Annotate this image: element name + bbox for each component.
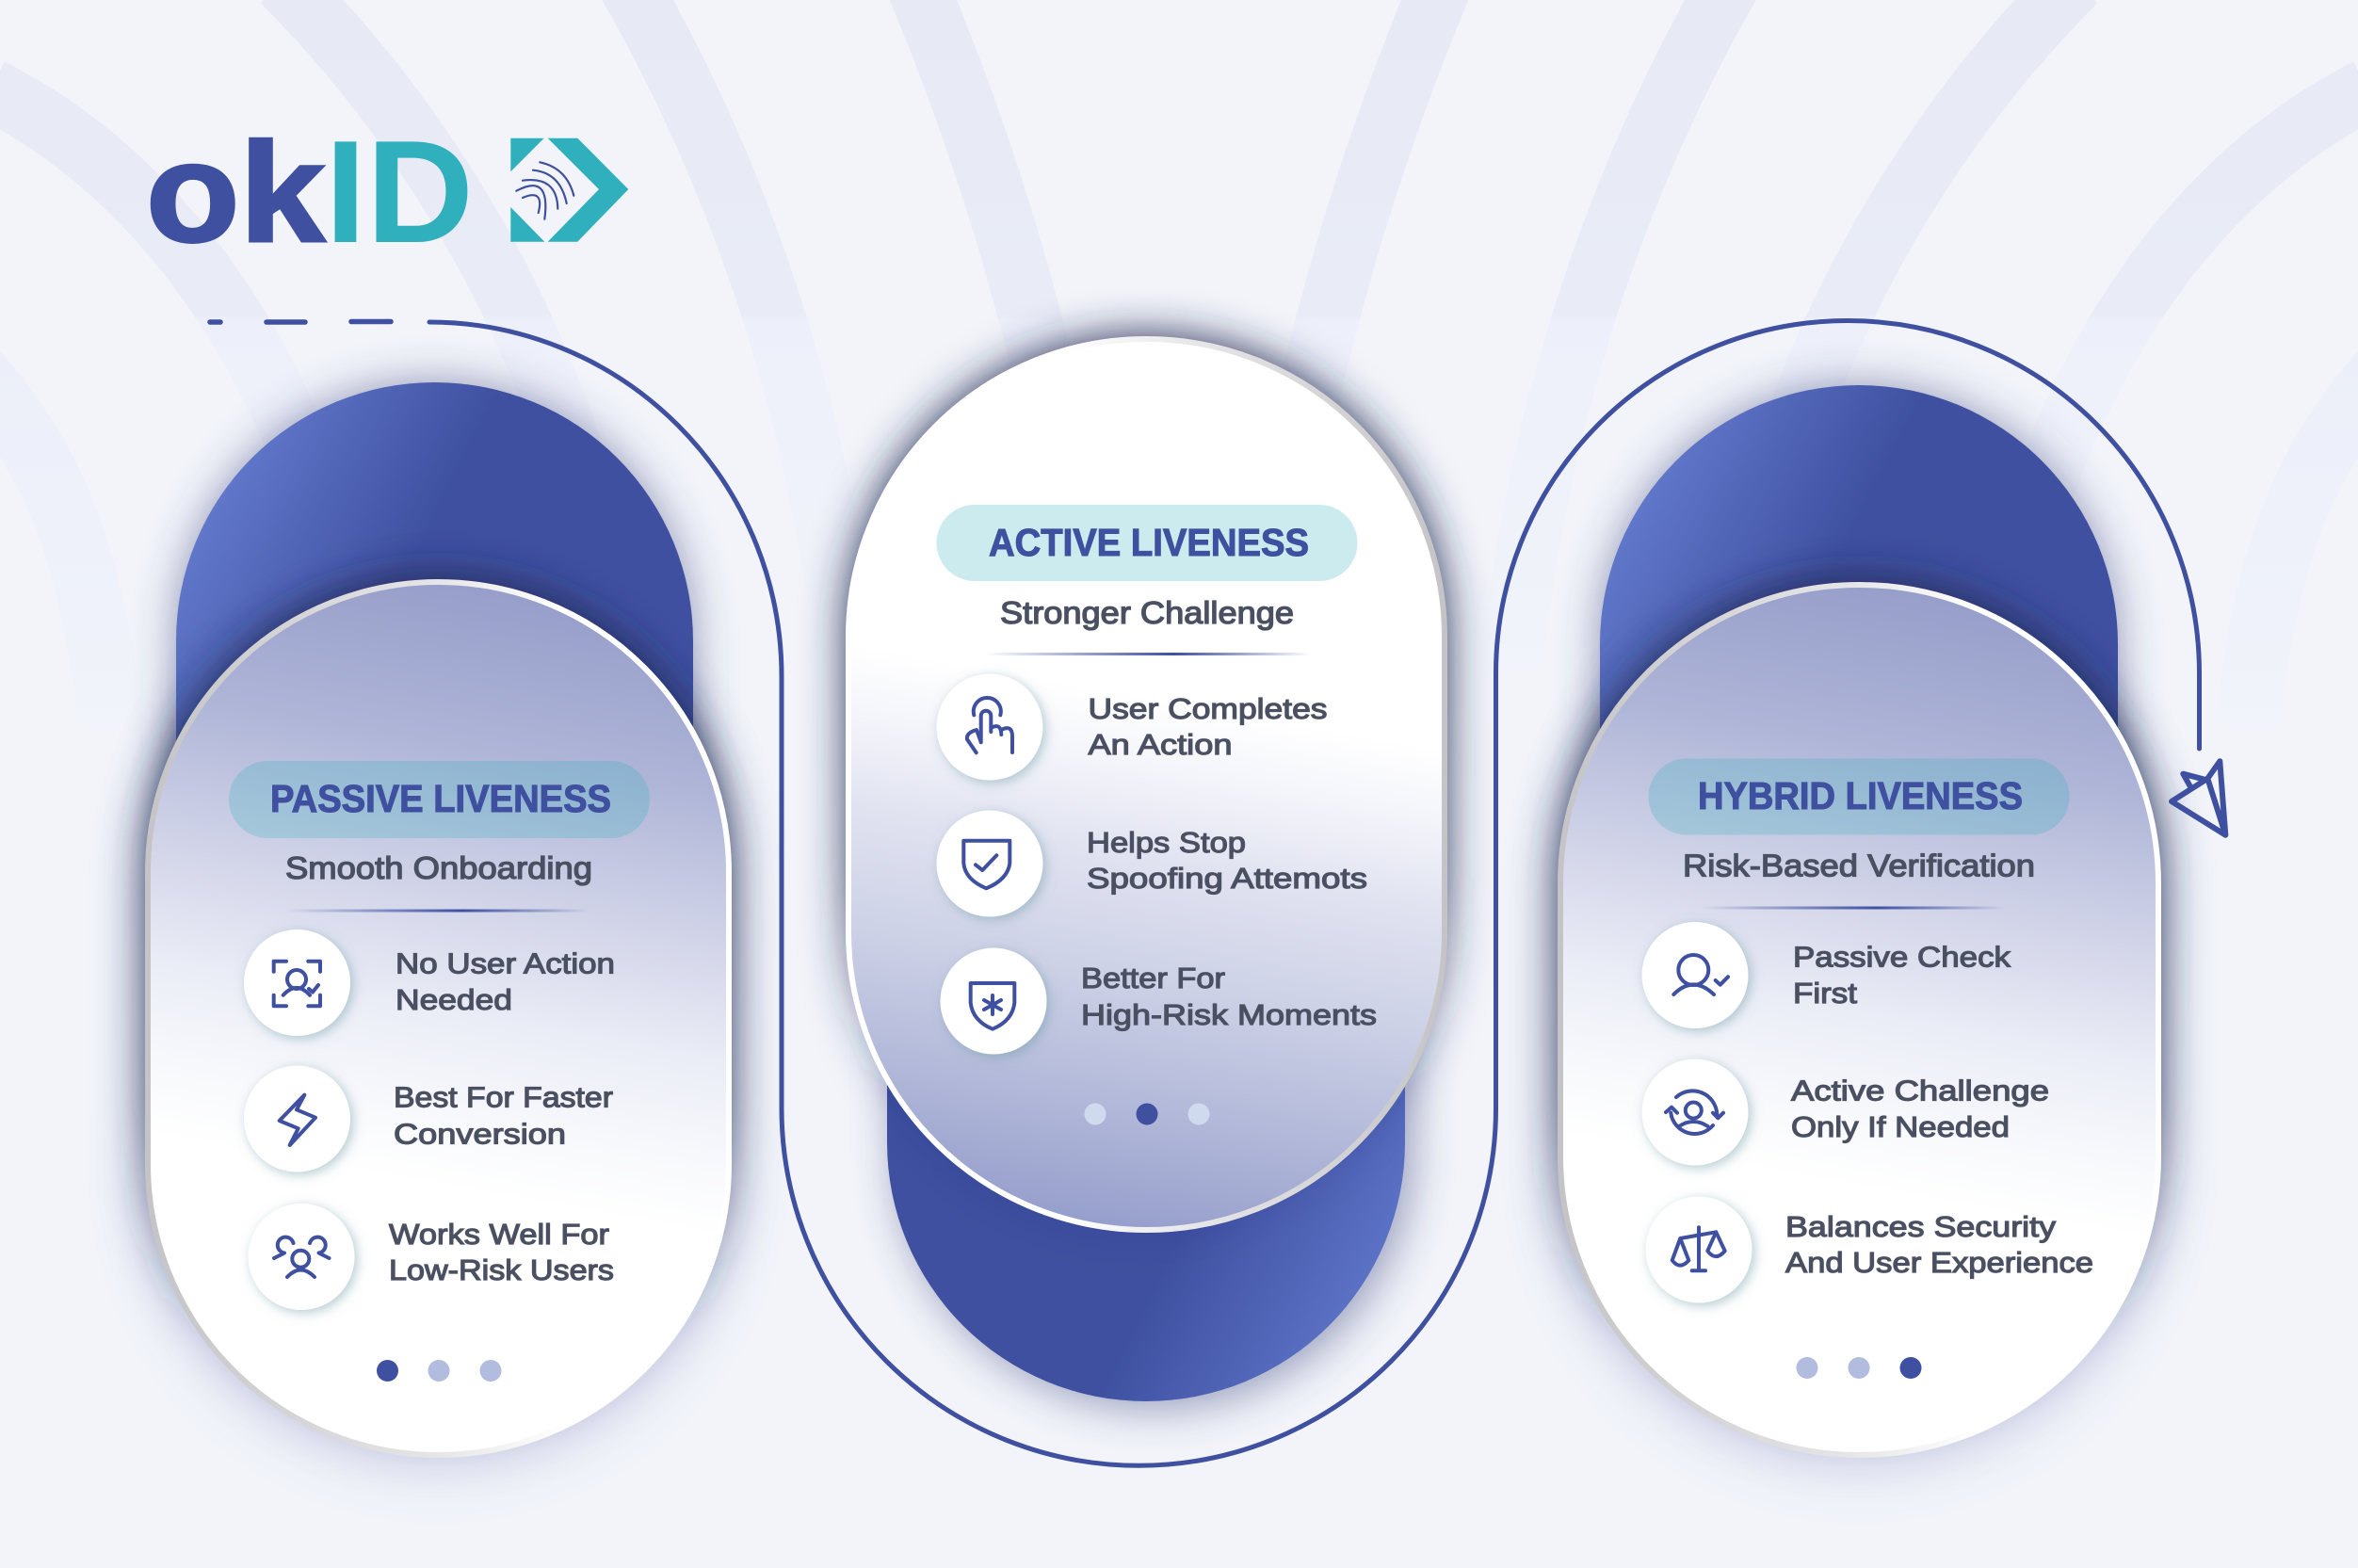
logo wordmark xyxy=(146,110,474,273)
item: best for faster conversion: Best For Faster xyxy=(394,1081,613,1113)
item: works well for low-risk users xyxy=(249,1204,614,1310)
logo: okID xyxy=(146,110,628,273)
active title pill: ACTIVE LIVENESS xyxy=(989,521,1309,564)
item: better for high-risk moments xyxy=(940,947,1377,1055)
item: active challenge only if needed xyxy=(1642,1059,2049,1166)
panel: hybrid liveness xyxy=(1558,385,2161,1467)
active card xyxy=(846,336,1447,1233)
active subtitle: Stronger Challenge xyxy=(1000,595,1294,630)
item: user completes an action: User Completes xyxy=(1089,692,1328,725)
item: helps stop spoofing attemots xyxy=(936,810,1367,917)
passive title pill xyxy=(229,761,650,838)
logo mark: fingerprint chevron xyxy=(510,138,628,242)
hybrid title pill xyxy=(1648,759,2070,834)
passive card xyxy=(145,579,732,1467)
passive backing shape xyxy=(176,382,693,1042)
hybrid backing shape xyxy=(1600,385,2118,1044)
hybrid title pill: HYBRID LIVENESS xyxy=(1698,774,2023,817)
item: helps stop spoofing attemots: Helps Stop xyxy=(1087,826,1246,859)
panel: passive liveness xyxy=(145,382,732,1467)
item: no user action needed: Needed xyxy=(396,983,512,1016)
passive subtitle: Smooth Onboarding xyxy=(285,850,592,885)
item: better for high-risk moments: High-Risk Moments xyxy=(1081,998,1377,1031)
item: no user action needed xyxy=(244,929,615,1036)
item: works well for low-risk users: Works Well For xyxy=(389,1218,609,1251)
active backing shape xyxy=(887,753,1413,1409)
item: helps stop spoofing attemots: Spoofing Attemots xyxy=(1087,862,1367,895)
arrow: paper plane xyxy=(2172,761,2225,835)
item: user completes an action: An Action xyxy=(1089,728,1232,761)
pagination dots xyxy=(377,1360,501,1382)
hybrid card xyxy=(1558,582,2161,1467)
item: best for faster conversion: Conversion xyxy=(394,1117,566,1151)
connector: dashed start and winding path xyxy=(210,320,2200,1465)
pagination dots xyxy=(1797,1357,1921,1379)
item: best for faster conversion xyxy=(244,1066,613,1172)
passive title pill: PASSIVE LIVENESS xyxy=(270,777,611,820)
item: active challenge only if needed: Active Challenge xyxy=(1791,1074,2049,1107)
pagination dots xyxy=(1085,1104,1209,1124)
item: balances security and user experience: And User Experience xyxy=(1785,1246,2093,1279)
item: passive check first: First xyxy=(1793,977,1857,1010)
item: active challenge only if needed: Only If Needed xyxy=(1791,1110,2010,1143)
item: balances security and user experience: Balances Security xyxy=(1785,1210,2057,1243)
logo wordmark: ok xyxy=(146,113,326,271)
item: passive check first: Passive Check xyxy=(1793,940,2011,974)
hybrid subtitle: Risk-Based Verification xyxy=(1683,848,2035,883)
item: balances security and user experience xyxy=(1646,1196,2093,1303)
item: user completes an action xyxy=(936,674,1328,780)
active title pill xyxy=(936,505,1358,581)
logo wordmark: ID xyxy=(325,110,474,273)
item: better for high-risk moments: Better For xyxy=(1081,962,1225,994)
panel: active liveness xyxy=(846,336,1447,1409)
background: curved bands xyxy=(0,0,2358,753)
item: no user action needed: No User Action xyxy=(396,947,615,979)
item: passive check first xyxy=(1642,922,2011,1028)
item: works well for low-risk users: Low-Risk Users xyxy=(389,1253,614,1286)
